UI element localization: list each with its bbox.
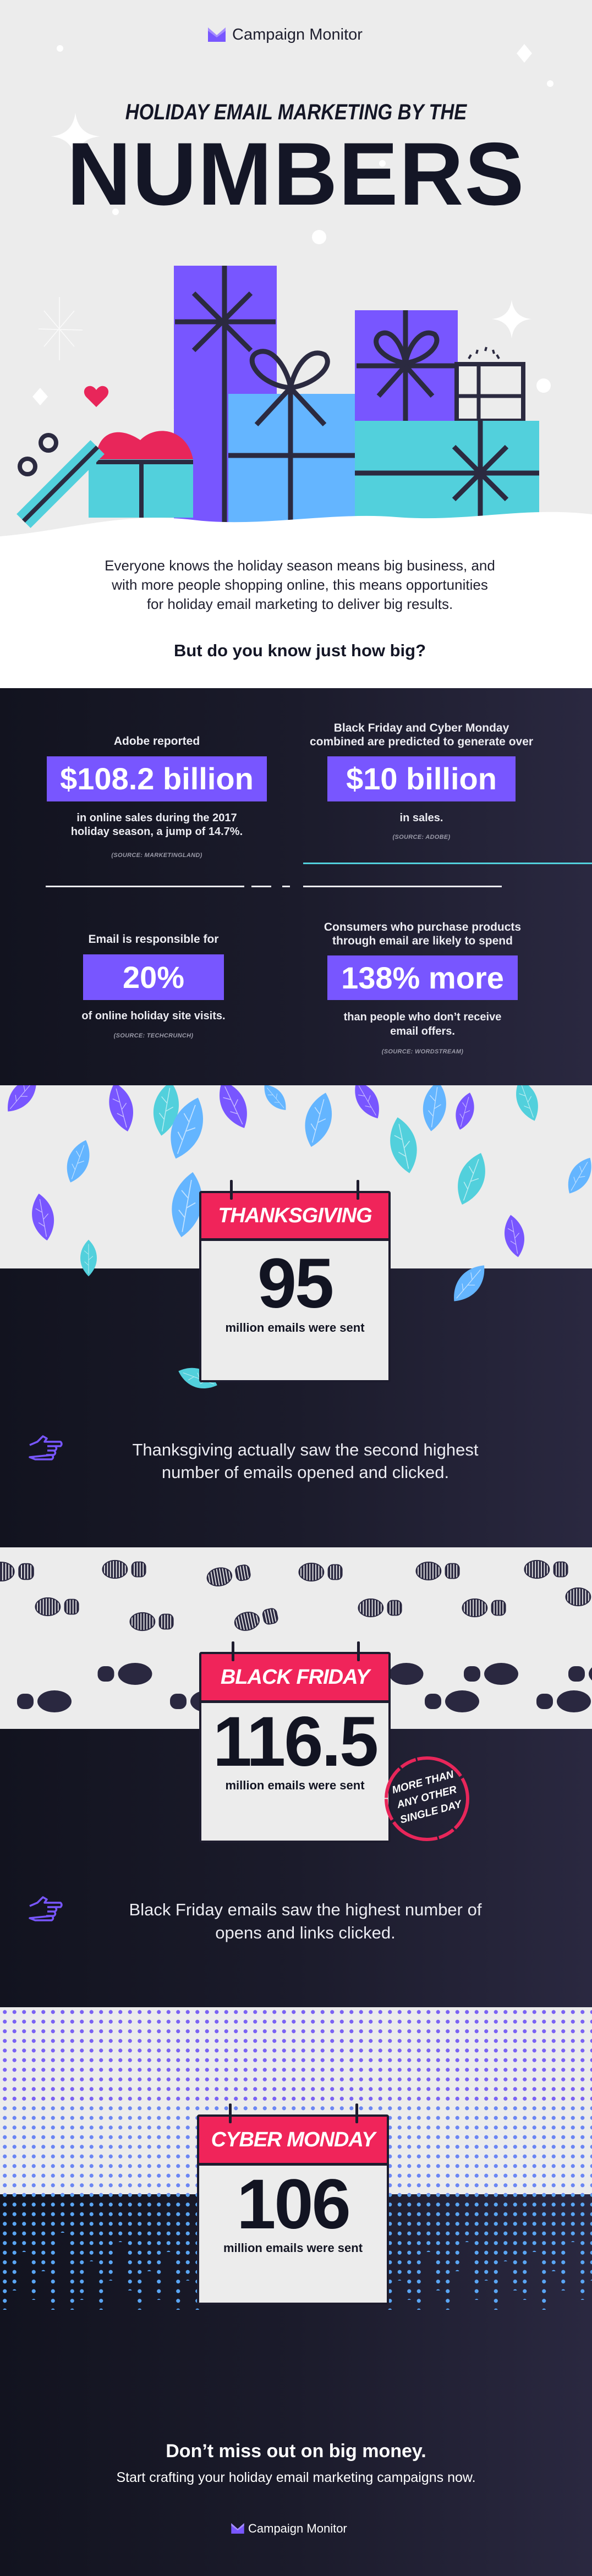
stat 4 [324,921,521,1055]
stat 3: (SOURCE: TECHCRUNCH) [114,1032,193,1039]
stat 2: (SOURCE: ADOBE) [393,834,450,841]
leaves [8,1085,591,1388]
intro text: for holiday email marketing to deliver big results. [147,596,453,612]
gift: small white [457,347,523,421]
calendar: black friday [199,1652,391,1843]
stamp: more than any other single day: SINGLE DAY [399,1799,463,1826]
stat 1: in online sales during the 2017 [76,812,237,824]
panel: cyber monday dark [0,2194,592,2576]
stat 1 [47,735,267,859]
footprints [0,1560,592,1712]
intro question: But do you know just how big? [174,641,426,660]
calendar: cyber monday [197,2114,389,2305]
stat 3: 20% [123,960,184,995]
stat 1: (SOURCE: MARKETINGLAND) [111,852,202,859]
closing heading: Don’t miss out on big money. [166,2441,426,2462]
icon: heart [84,386,108,407]
stat 4: through email are likely to spend [332,935,513,947]
stamp: more than any other single day: MORE THAN [391,1768,455,1797]
stat 4: than people who don’t receive [344,1011,501,1023]
decorations and gifts [0,44,592,688]
gift: tall purple [174,266,277,524]
stat 2: in sales. [400,812,443,824]
stat 2: combined are predicted to generate over [310,735,533,748]
gift: blue [228,351,355,524]
header background [0,0,592,688]
calendar: thanksgiving: 95 [257,1244,332,1323]
stat 4: Consumers who purchase products [324,921,521,933]
snow [0,512,592,688]
sparkles [32,44,553,518]
stat 1: Adobe reported [114,735,200,748]
panel: thanksgiving dark [0,1268,592,1547]
gift: open box with lid [17,431,193,528]
stat 4: 138% more [341,960,504,995]
calendar: thanksgiving: million emails were sent [225,1321,365,1334]
calendar: cyber monday: million emails were sent [223,2241,363,2255]
gift: purple right [355,310,458,421]
stat 1: holiday season, a jump of 14.7%. [71,826,243,838]
panel: stats [0,688,592,1085]
black friday note with hand icon: Black Friday emails saw the highest number of [129,1900,481,1919]
logo top: Campaign Monitor [232,26,363,43]
stat 4: (SOURCE: WORDSTREAM) [382,1048,463,1055]
stat 3: of online holiday site visits. [81,1010,226,1022]
calendar: thanksgiving [199,1191,391,1382]
black friday note with hand icon [29,1896,482,1942]
black friday note with hand icon: opens and links clicked. [215,1923,396,1942]
stat 2: $10 billion [346,761,497,796]
calendar pins [229,2103,358,2123]
dot pattern [3,2010,592,2310]
calendar: black friday: 116.5 [213,1702,377,1781]
stat 2: Black Friday and Cyber Monday [334,722,509,734]
intro text [105,557,495,612]
title: NUMBERS: NUMBERS [67,124,525,224]
calendar: black friday: million emails were sent [225,1778,365,1792]
calendar: cyber monday: CYBER MONDAY [211,2128,375,2151]
stamp: more than any other single day: ANY OTHER [396,1784,458,1811]
stat 4: email offers. [390,1025,455,1037]
stat 1: $108.2 billion [60,761,254,796]
panel: black friday dark [0,1729,592,2007]
calendar: thanksgiving: THANKSGIVING [218,1204,372,1227]
intro text: with more people shopping online, this means opportunities [112,576,488,593]
stamp: more than any other single day [385,1756,469,1841]
title: subtitle: HOLIDAY EMAIL MARKETING BY THE [125,100,467,124]
calendar: black friday: BLACK FRIDAY [221,1666,369,1689]
stat 3: Email is responsible for [89,933,218,946]
calendar pins [230,1180,359,1200]
closing text: Start crafting your holiday email marketing campaigns now. [116,2470,476,2485]
thanksgiving note with hand icon: Thanksgiving actually saw the second highest [132,1440,478,1459]
thanksgiving note with hand icon [29,1435,479,1482]
thanksgiving note with hand icon: number of emails opened and clicked. [162,1463,449,1482]
stat 3 [81,933,226,1039]
calendar: cyber monday: 106 [237,2165,349,2244]
white dividers [46,886,502,887]
intro text: Everyone knows the holiday season means big business, and [105,557,495,574]
logo bottom: Campaign Monitor [248,2522,347,2535]
gift: cyan [355,421,539,524]
stat 2 [310,722,533,841]
calendar pins [232,1641,360,1661]
teal line [303,863,592,864]
